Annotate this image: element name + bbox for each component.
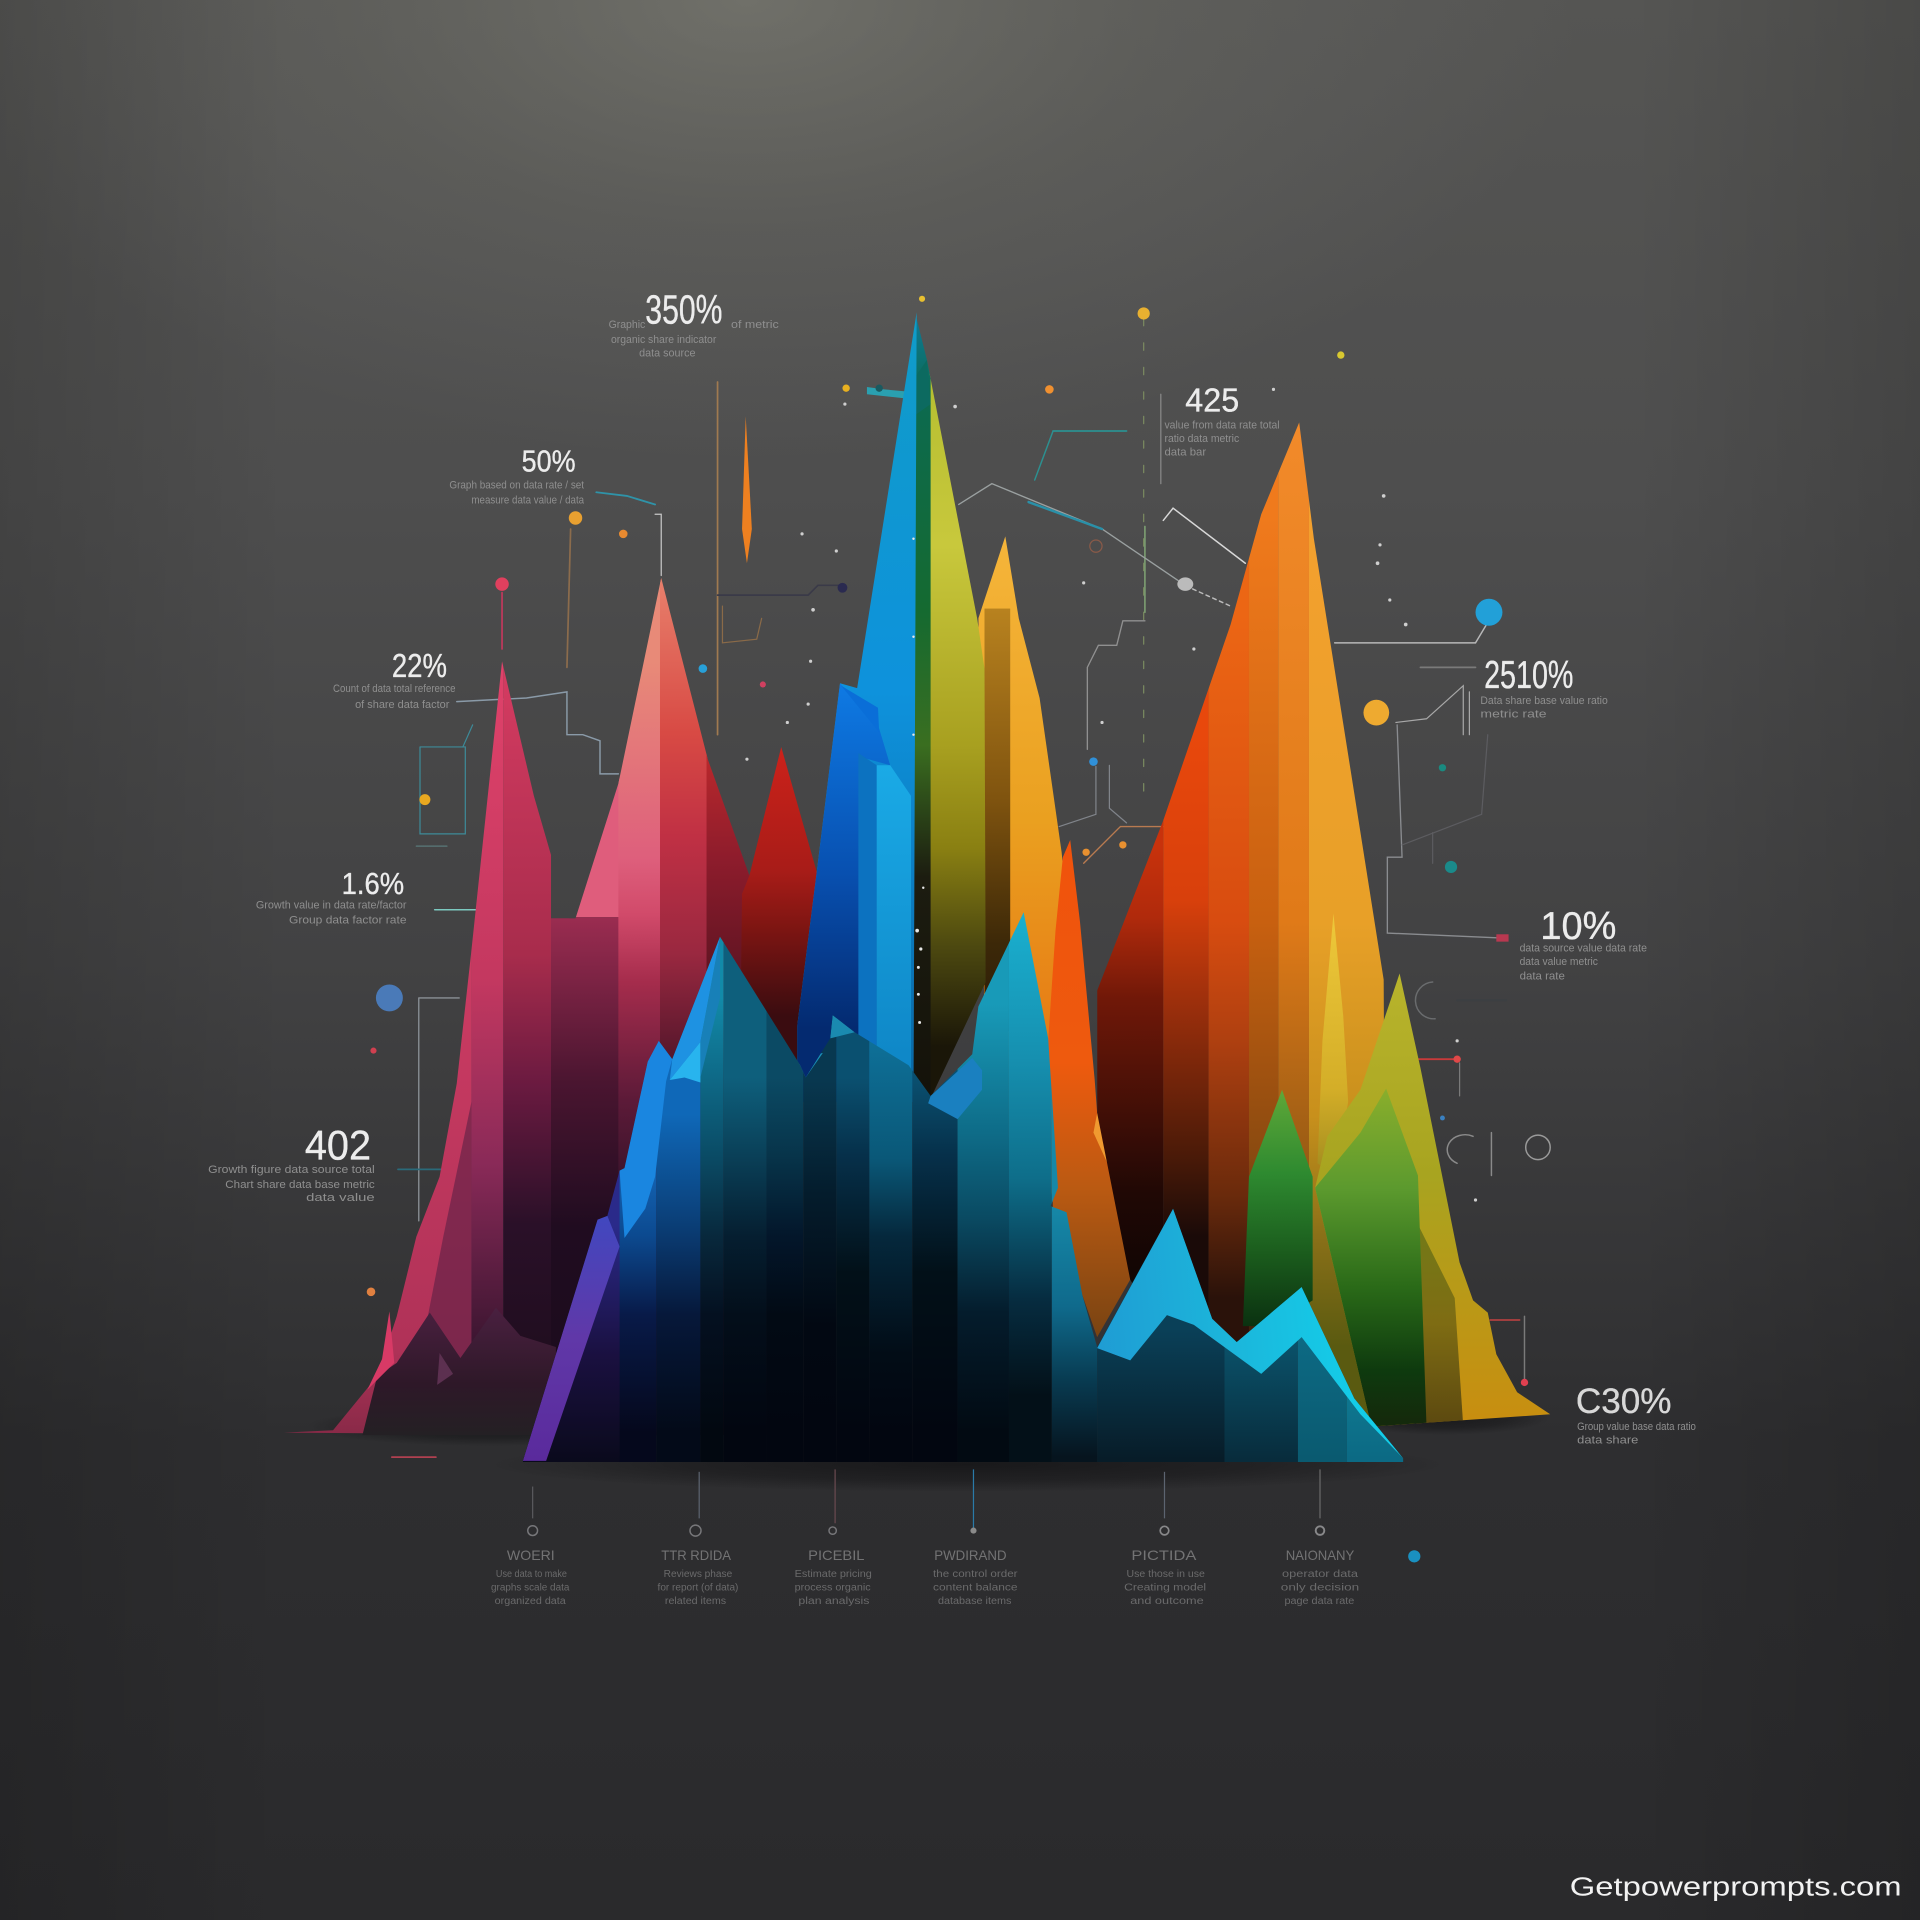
- label: 425: data bar: [1164, 447, 1206, 459]
- label: C30%: C30%: [1576, 1381, 1671, 1421]
- label: 1.6%: 1.6%: [342, 867, 404, 901]
- bottom column 3: PICEBIL: [808, 1548, 865, 1563]
- label: 2510%: metric rate: [1480, 709, 1547, 721]
- bottom column 5: PICTIDA: [1131, 1548, 1196, 1563]
- label: 350%: [609, 286, 779, 359]
- label: 10%: data rate: [1520, 971, 1565, 983]
- label: 10%: 10%: [1540, 905, 1616, 948]
- bottom column 5: Creating model: [1124, 1583, 1206, 1594]
- bottom column 4: database items: [938, 1596, 1011, 1607]
- label: 402: data value: [306, 1192, 375, 1204]
- bottom column 3: process organic: [795, 1583, 871, 1594]
- bottom column 3: plan analysis: [798, 1596, 869, 1607]
- sparkles on dark strip: [912, 538, 924, 1024]
- label: 22%: of share data factor: [355, 699, 450, 711]
- label: 402: [208, 1122, 375, 1204]
- label: 50%: Graph based on data rate / set: [449, 480, 584, 492]
- bottom column 6: page data rate: [1284, 1596, 1355, 1607]
- spike: small orange marker: [742, 416, 752, 563]
- chart: green small peak: [1243, 1090, 1313, 1326]
- bottom column 3: [795, 1469, 872, 1607]
- connector lines and scattered dots: [392, 318, 1550, 1457]
- chart: coral peak: [551, 578, 750, 1404]
- bottom column 1: [491, 1487, 570, 1607]
- highlighted marker dots: [367, 296, 1528, 1562]
- bottom column 4: PWDIRAND: [934, 1548, 1007, 1563]
- label: C30%: Group value base data ratio: [1577, 1421, 1696, 1433]
- label: 2510%: [1480, 654, 1608, 721]
- label: 350%: Graphic: [609, 319, 646, 331]
- bottom column 4: the control order: [933, 1569, 1018, 1580]
- label: 10%: [1520, 905, 1647, 983]
- label: 1.6%: [256, 867, 407, 926]
- chart: amber peak: [978, 536, 1062, 1194]
- bottom column 1: organized data: [495, 1596, 566, 1607]
- label: C30%: data share: [1577, 1435, 1638, 1447]
- bottom column 2: for report (of data): [658, 1583, 738, 1594]
- chart: yellow-green peak: [912, 312, 991, 1102]
- bottom column 4: [933, 1469, 1018, 1607]
- chart: orange peak: [1097, 422, 1384, 1416]
- bottom column 1: graphs scale data: [491, 1583, 570, 1594]
- label: 425: ratio data metric: [1164, 433, 1240, 445]
- label: 1.6%: Growth value in data rate/factor: [256, 900, 407, 912]
- ground shadow: [306, 1401, 1549, 1491]
- bottom column 5: Use those in use: [1127, 1569, 1205, 1580]
- label: 350%: of metric: [731, 319, 779, 331]
- chart: yellow-green right peak: [1315, 974, 1550, 1426]
- bottom column 5: [1124, 1472, 1206, 1607]
- bottom column 1: Use data to make: [496, 1569, 567, 1580]
- watermark: Getpowerprompts.com: [1570, 1874, 1902, 1902]
- label: 50%: [449, 444, 585, 506]
- label: 22%: 22%: [392, 648, 447, 685]
- label: 402: 402: [305, 1122, 371, 1169]
- label: 2510%: Data share base value ratio: [1480, 695, 1608, 707]
- label: C30%: [1576, 1381, 1696, 1447]
- bottom column 4: content balance: [933, 1583, 1018, 1594]
- label: 350%: data source: [639, 347, 696, 359]
- label: 350%: 350%: [645, 286, 722, 332]
- label: 350%: organic share indicator: [611, 334, 717, 346]
- label: 1.6%: Group data factor rate: [289, 914, 407, 926]
- chart: orange flame peak: [1048, 840, 1130, 1337]
- chart: pink peak: [285, 662, 570, 1434]
- label: 50%: measure data value / data: [471, 494, 585, 506]
- label: 425: value from data rate total: [1164, 420, 1280, 432]
- chart: blue tall peak: [790, 306, 920, 1102]
- bottom column 6: [1281, 1469, 1360, 1607]
- bottom column 1: WOERI: [507, 1548, 555, 1563]
- bottom column 6: NAIONANY: [1286, 1548, 1354, 1563]
- label: 22%: Count of data total reference: [333, 683, 456, 695]
- label: 10%: data value metric: [1520, 956, 1598, 968]
- chart: front blue range: [520, 906, 1408, 1469]
- label: 50%: 50%: [522, 444, 576, 478]
- label: 22%: [333, 648, 456, 711]
- label: 10%: data source value data rate: [1520, 942, 1647, 954]
- bottom column 3: Estimate pricing: [795, 1569, 872, 1580]
- bottom column 5: and outcome: [1130, 1596, 1204, 1607]
- bottom column 6: operator data: [1282, 1569, 1358, 1580]
- label: 402: Growth figure data source total: [208, 1164, 375, 1176]
- bottom column 2: TTR RDIDA: [661, 1548, 731, 1563]
- bottom column 2: Reviews phase: [664, 1569, 733, 1580]
- bottom column 2: related items: [665, 1596, 726, 1607]
- chart: red peak: [740, 747, 817, 1102]
- label: 2510%: 2510%: [1484, 654, 1573, 697]
- label: 425: [1164, 382, 1280, 459]
- label: 425: 425: [1185, 382, 1239, 419]
- bottom column 2: [658, 1472, 738, 1607]
- bottom column 6: only decision: [1281, 1583, 1360, 1594]
- chart: small pink foothills: [362, 1308, 556, 1435]
- label: 402: Chart share data base metric: [225, 1179, 375, 1191]
